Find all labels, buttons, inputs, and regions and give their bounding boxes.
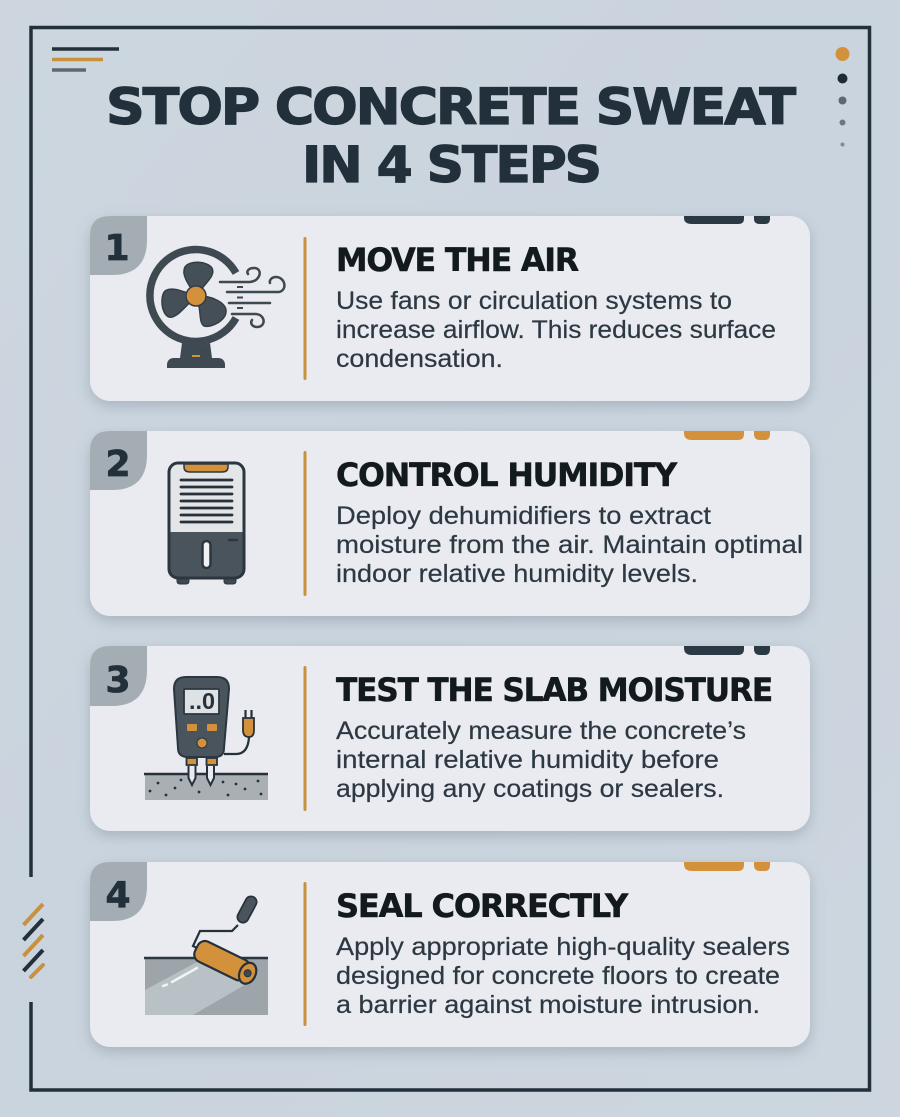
- step number badge 1: [90, 216, 147, 275]
- step 4 description: designed for concrete floors to create: [336, 962, 780, 990]
- step 2 description: indoor relative humidity levels.: [336, 560, 698, 588]
- step 3 description: internal relative humidity before: [336, 746, 719, 774]
- step number badge 2: 2: [105, 444, 131, 485]
- title: [106, 78, 796, 194]
- title: STOP CONCRETE SWEAT: [106, 78, 796, 136]
- icon: moisture meter: [144, 677, 268, 800]
- step 1 heading: MOVE THE AIR: [336, 241, 579, 279]
- step 3 description: Accurately measure the concrete’s: [336, 717, 746, 745]
- top-right accent dots: [836, 47, 850, 146]
- panel: step 2 control humidity: [90, 431, 810, 616]
- step 2 description: moisture from the air. Maintain optimal: [336, 531, 803, 559]
- icon: moisture meter: ..0: [189, 688, 215, 714]
- icon: fan: [150, 249, 284, 368]
- step 4 heading: SEAL CORRECTLY: [336, 887, 629, 925]
- step 4 description: [336, 933, 790, 1019]
- step 3 heading: TEST THE SLAB MOISTURE: [336, 671, 772, 709]
- step number badge 1: 1: [104, 228, 130, 269]
- title: IN 4 STEPS: [302, 136, 600, 194]
- step number badge 2: [90, 431, 147, 490]
- step 4 description: Apply appropriate high-quality sealers: [336, 933, 790, 961]
- step number badge 3: [90, 646, 147, 706]
- step 4 description: a barrier against moisture intrusion.: [336, 991, 760, 1019]
- icon: paint roller on floor: [144, 902, 268, 1015]
- left accent stripes: [24, 904, 43, 977]
- icon: dehumidifier: [169, 463, 244, 584]
- panel: step 1 move the air: [90, 216, 810, 401]
- step 1 description: increase airflow. This reduces surface: [336, 316, 776, 344]
- step 1 description: Use fans or circulation systems to: [336, 287, 732, 315]
- panel: step 4 seal correctly: [90, 862, 810, 1047]
- panel: step 3 test the slab moisture: [90, 646, 810, 831]
- step 2 description: [336, 502, 803, 588]
- step 1 description: condensation.: [336, 345, 503, 373]
- step 3 description: applying any coatings or sealers.: [336, 775, 724, 803]
- step number badge 4: [90, 862, 147, 921]
- step 3 description: [336, 717, 746, 803]
- top-left accent lines: [52, 49, 119, 70]
- step 2 description: Deploy dehumidifiers to extract: [336, 502, 711, 530]
- step 1 description: [336, 287, 776, 373]
- step 2 heading: CONTROL HUMIDITY: [336, 456, 678, 494]
- step number badge 3: 3: [105, 660, 131, 701]
- step number badge 4: 4: [105, 875, 131, 916]
